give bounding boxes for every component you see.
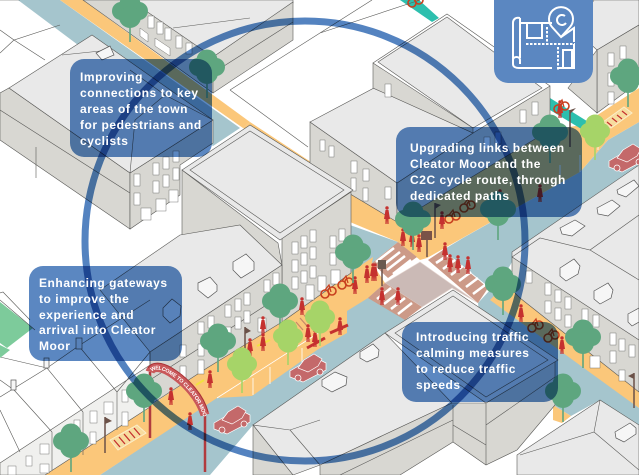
building: south roof with chimneys <box>253 333 452 475</box>
callout: improving connections: Improving <box>80 70 143 84</box>
crossing: north-east <box>428 250 488 303</box>
tree <box>53 424 89 472</box>
callout: improving connections: cyclists <box>80 134 128 148</box>
callout: enhancing gateways: arrival into Cleator <box>39 323 156 337</box>
people and benches <box>168 100 565 430</box>
roof boxes <box>560 180 639 442</box>
light tree <box>227 348 257 393</box>
crossroads <box>368 242 488 320</box>
callout: improving connections <box>70 59 212 157</box>
bike racks <box>110 107 632 450</box>
building: main street terrace roof with chimneys <box>100 225 282 405</box>
light tree <box>305 300 335 346</box>
callout: traffic calming <box>402 322 558 402</box>
building: block A left <box>0 35 213 229</box>
tree <box>480 192 516 240</box>
callout: enhancing gateways: experience and <box>39 308 134 322</box>
callout: improving connections: for pedestrians and <box>80 118 202 132</box>
callout: enhancing gateways: to improve the <box>39 292 129 306</box>
building: south-east roof <box>517 400 639 475</box>
chimney <box>96 46 114 60</box>
car 3 <box>609 144 639 172</box>
callout: traffic calming: calming measures <box>416 346 530 360</box>
cars <box>214 144 639 434</box>
crossing: north-west <box>372 242 417 278</box>
pavement bollard lines <box>217 140 598 398</box>
callout: enhancing gateways: Moor <box>39 339 71 353</box>
welcome gateway arch: WELCOME TO CLEATOR MOOR <box>150 366 207 416</box>
building: lower-left terrace <box>0 300 150 475</box>
callout: upgrading links: dedicated paths <box>410 189 510 203</box>
callout: traffic calming: Introducing traffic <box>416 330 529 344</box>
icon panel: map pin <box>494 0 593 83</box>
tree <box>485 266 521 315</box>
building: east block with chimneys <box>512 165 639 392</box>
callout: upgrading links <box>396 127 582 217</box>
tree <box>610 58 639 107</box>
callout: traffic calming: speeds <box>416 378 461 392</box>
focus circle <box>85 21 525 461</box>
tree <box>112 0 148 42</box>
building: far top-left white roofs <box>0 0 60 60</box>
callout: improving connections: connections to key <box>80 86 199 100</box>
street lamps <box>105 108 634 453</box>
bench <box>257 340 270 346</box>
cycle paths <box>400 0 590 130</box>
crossing: south-west <box>368 283 422 320</box>
building: top centre <box>83 0 293 93</box>
callout: upgrading links: Upgrading links between <box>410 141 565 155</box>
tree <box>565 320 601 368</box>
callout: enhancing gateways: Enhancing gateways <box>39 276 168 290</box>
white roof outline centre <box>230 0 420 147</box>
green roof garden <box>0 292 35 358</box>
tree <box>395 202 431 250</box>
light tree <box>580 114 610 160</box>
callout: enhancing gateways <box>29 266 182 361</box>
callout: upgrading links: C2C cycle route, through <box>410 173 566 187</box>
building: north-east corner <box>568 0 639 113</box>
light tree <box>273 320 303 365</box>
callout: improving connections: areas of the town <box>80 102 188 116</box>
tree <box>262 284 298 332</box>
welcome gateway arch <box>146 362 210 472</box>
tree <box>126 374 162 422</box>
tree <box>200 324 236 372</box>
tree <box>189 50 225 98</box>
tree <box>532 114 568 163</box>
building: centre block B <box>182 125 353 322</box>
tree <box>545 374 581 422</box>
car 2 <box>290 354 326 382</box>
car 1 <box>214 406 250 434</box>
building: block E with windows <box>310 86 550 222</box>
building: block D <box>373 14 550 133</box>
cyclists <box>321 0 569 342</box>
tree <box>335 234 371 283</box>
icon: map with location pin <box>513 7 575 70</box>
chimneys <box>163 254 254 323</box>
callout: traffic calming: to reduce traffic <box>416 362 516 376</box>
callout: upgrading links: Cleator Moor and the <box>410 157 541 171</box>
building: south corner block <box>320 290 558 475</box>
